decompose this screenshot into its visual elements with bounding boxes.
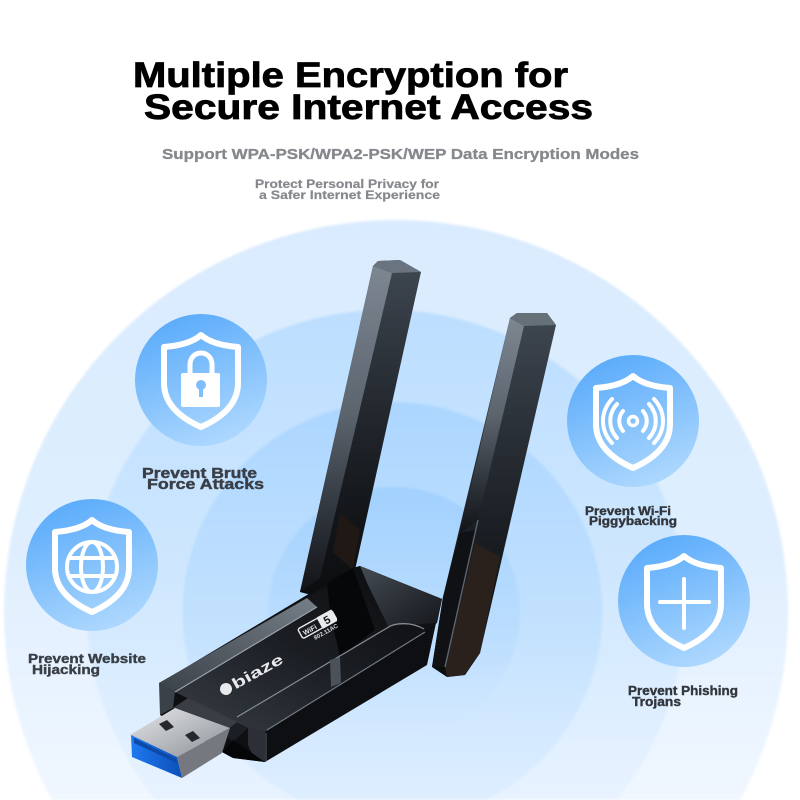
privacy note: Protect Personal Privacy for bbox=[255, 177, 439, 191]
concentric signal background bbox=[4, 220, 788, 800]
usb wi-fi adapter bbox=[130, 260, 556, 778]
label: prevent phishing trojans bbox=[628, 683, 738, 709]
label: prevent website hijacking bbox=[28, 651, 146, 677]
label: prevent brute force attacks bbox=[142, 465, 264, 493]
title: Multiple Encryption for bbox=[133, 56, 568, 95]
wifi 5 badge bbox=[297, 609, 341, 647]
title: Secure Internet Access bbox=[144, 88, 593, 127]
wifi 5 badge: 802.11AC bbox=[313, 623, 340, 642]
icon: shield with globe bbox=[26, 499, 158, 631]
hinge bbox=[327, 568, 375, 657]
label: prevent brute force attacks: Prevent Brute bbox=[142, 465, 257, 482]
left antenna bbox=[300, 260, 421, 600]
usb plug bbox=[130, 698, 237, 778]
subtitle: Support WPA-PSK/WPA2-PSK/WEP Data Encryption Modes bbox=[162, 146, 639, 163]
adapter body bbox=[159, 566, 442, 762]
wifi 5 badge: WiFi bbox=[302, 624, 319, 637]
icon: shield with wireless signal bbox=[567, 355, 699, 487]
privacy note bbox=[255, 177, 440, 202]
brand logo: biaze bbox=[229, 651, 286, 693]
label: prevent brute force attacks: Force Attacks bbox=[147, 476, 264, 493]
icon: shield with plus bbox=[618, 535, 750, 667]
label: prevent wi-fi piggybacking: Piggybacking bbox=[589, 514, 677, 528]
right antenna bbox=[432, 313, 556, 677]
front corner bbox=[248, 728, 265, 762]
label: prevent phishing trojans: Prevent Phishing bbox=[628, 683, 738, 698]
label: prevent website hijacking: Prevent Website bbox=[28, 651, 146, 666]
label: prevent phishing trojans: Trojans bbox=[632, 694, 681, 709]
glossy band bbox=[159, 598, 317, 692]
label: prevent website hijacking: Hijacking bbox=[32, 662, 100, 677]
label: prevent wi-fi piggybacking: Prevent Wi-Fi bbox=[585, 504, 671, 518]
title bbox=[133, 56, 593, 127]
privacy note: a Safer Internet Experience bbox=[259, 188, 440, 202]
label: prevent wi-fi piggybacking bbox=[585, 504, 677, 528]
brand logo bbox=[217, 651, 286, 700]
top face bbox=[159, 566, 442, 732]
wifi 5 badge: 5 bbox=[322, 614, 333, 627]
icon: shield with padlock bbox=[135, 314, 267, 446]
